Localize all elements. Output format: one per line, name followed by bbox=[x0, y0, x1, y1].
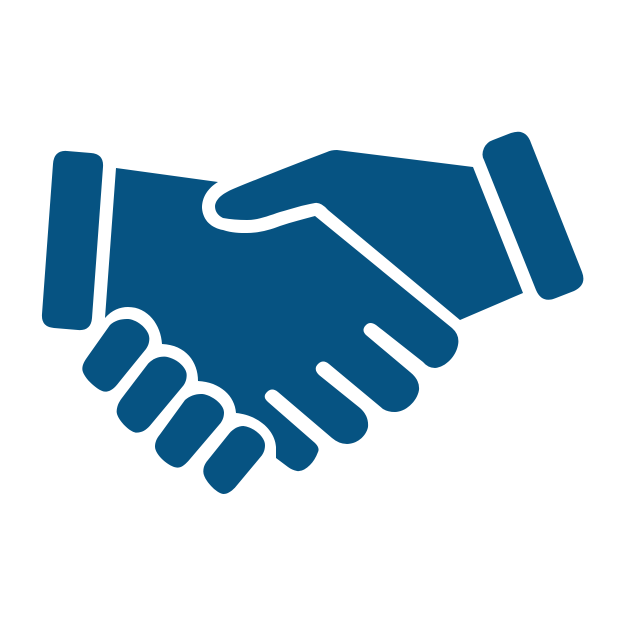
fingers bbox=[82, 319, 265, 494]
finger 2 bbox=[117, 357, 187, 433]
right cuff bbox=[482, 132, 583, 300]
left hand bbox=[105, 168, 458, 471]
finger 4 bbox=[203, 426, 265, 494]
left cuff bbox=[42, 151, 103, 330]
finger 3 bbox=[155, 394, 224, 468]
right hand bbox=[215, 150, 523, 320]
finger 1 bbox=[82, 319, 149, 392]
